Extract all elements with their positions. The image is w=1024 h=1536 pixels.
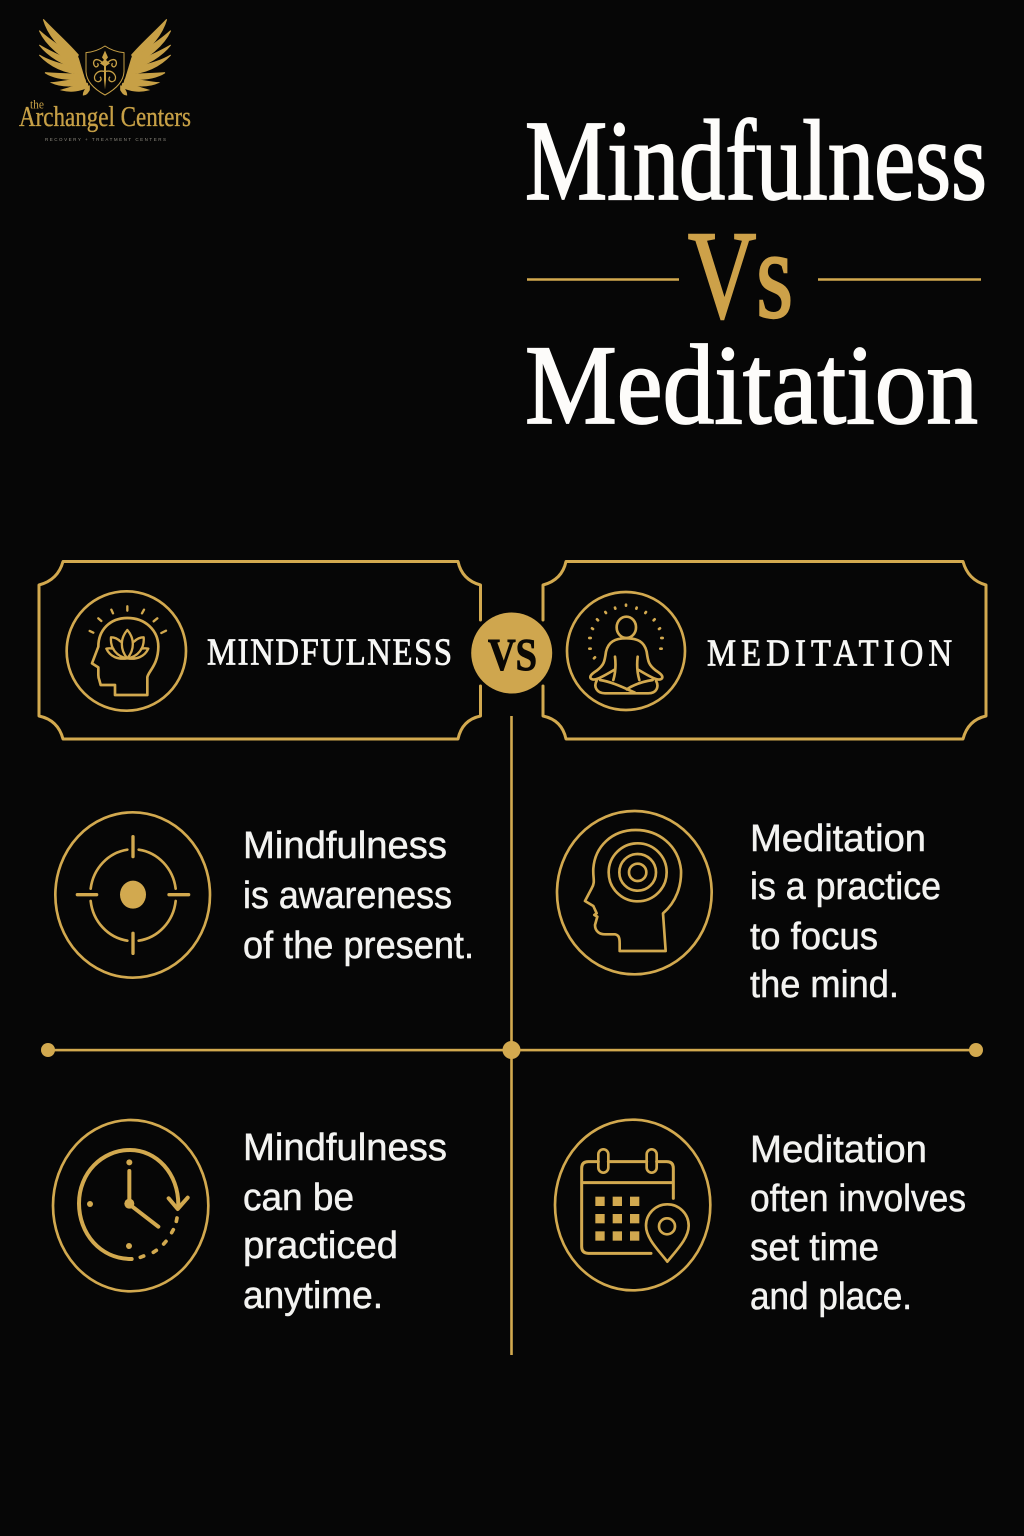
text block [750,1129,966,1318]
icon: target crosshair [55,812,210,978]
icon: winged shield [39,19,171,95]
logo: The Archangel Centers [19,19,191,142]
text block [243,1127,447,1317]
text block: practiced [243,1225,398,1267]
text block: is awareness [243,875,452,917]
text block: set time [750,1227,879,1269]
title [525,97,987,448]
right wing [121,19,171,95]
text block: Mindfulness [243,1127,447,1169]
text block: and place. [750,1276,912,1318]
icon: head with lotus [67,591,186,711]
panel label: MINDFULNESS [207,630,452,673]
VS badge: VS [488,629,537,680]
logo wordmark: the: the [30,98,44,112]
text block: often involves [750,1178,966,1220]
cell: meditation practice [557,811,941,1006]
cell: meditation set time and place [555,1120,966,1318]
cell: mindfulness awareness [55,812,474,978]
panel label: MEDITATION [707,631,952,674]
text block: Meditation [750,818,926,860]
title line: Vs with rules: Vs [688,207,793,345]
title line: Meditation: Meditation [525,323,978,448]
logo tagline: RECOVERY + TREATMENT CENTERS [45,137,166,142]
text block [243,825,474,967]
icon: seated meditator [567,592,685,710]
panel frame [543,562,986,739]
text block: is a practice [750,866,941,908]
cell: mindfulness anytime [53,1120,447,1317]
VS badge [471,612,552,694]
panel: mindfulness header [39,562,480,739]
text block: the mind. [750,964,899,1006]
icon: head with concentric rings [557,811,712,974]
text block: to focus [750,916,878,958]
logo wordmark: Archangel Centers: Archangel Centers [19,102,191,133]
horizontal divider with dots [41,1041,983,1059]
shield [86,46,124,95]
icon: clock with arrow [53,1120,208,1291]
panel: meditation header [543,562,986,739]
text block: of the present. [243,925,474,967]
vertical divider [510,716,513,1355]
text block: anytime. [243,1275,383,1317]
text block: Meditation [750,1129,927,1171]
text block: Mindfulness [243,825,447,867]
panel frame [39,562,480,739]
left wing [39,19,89,95]
text block: can be [243,1177,354,1219]
icon: calendar with pin [555,1120,710,1290]
text block [750,818,941,1006]
